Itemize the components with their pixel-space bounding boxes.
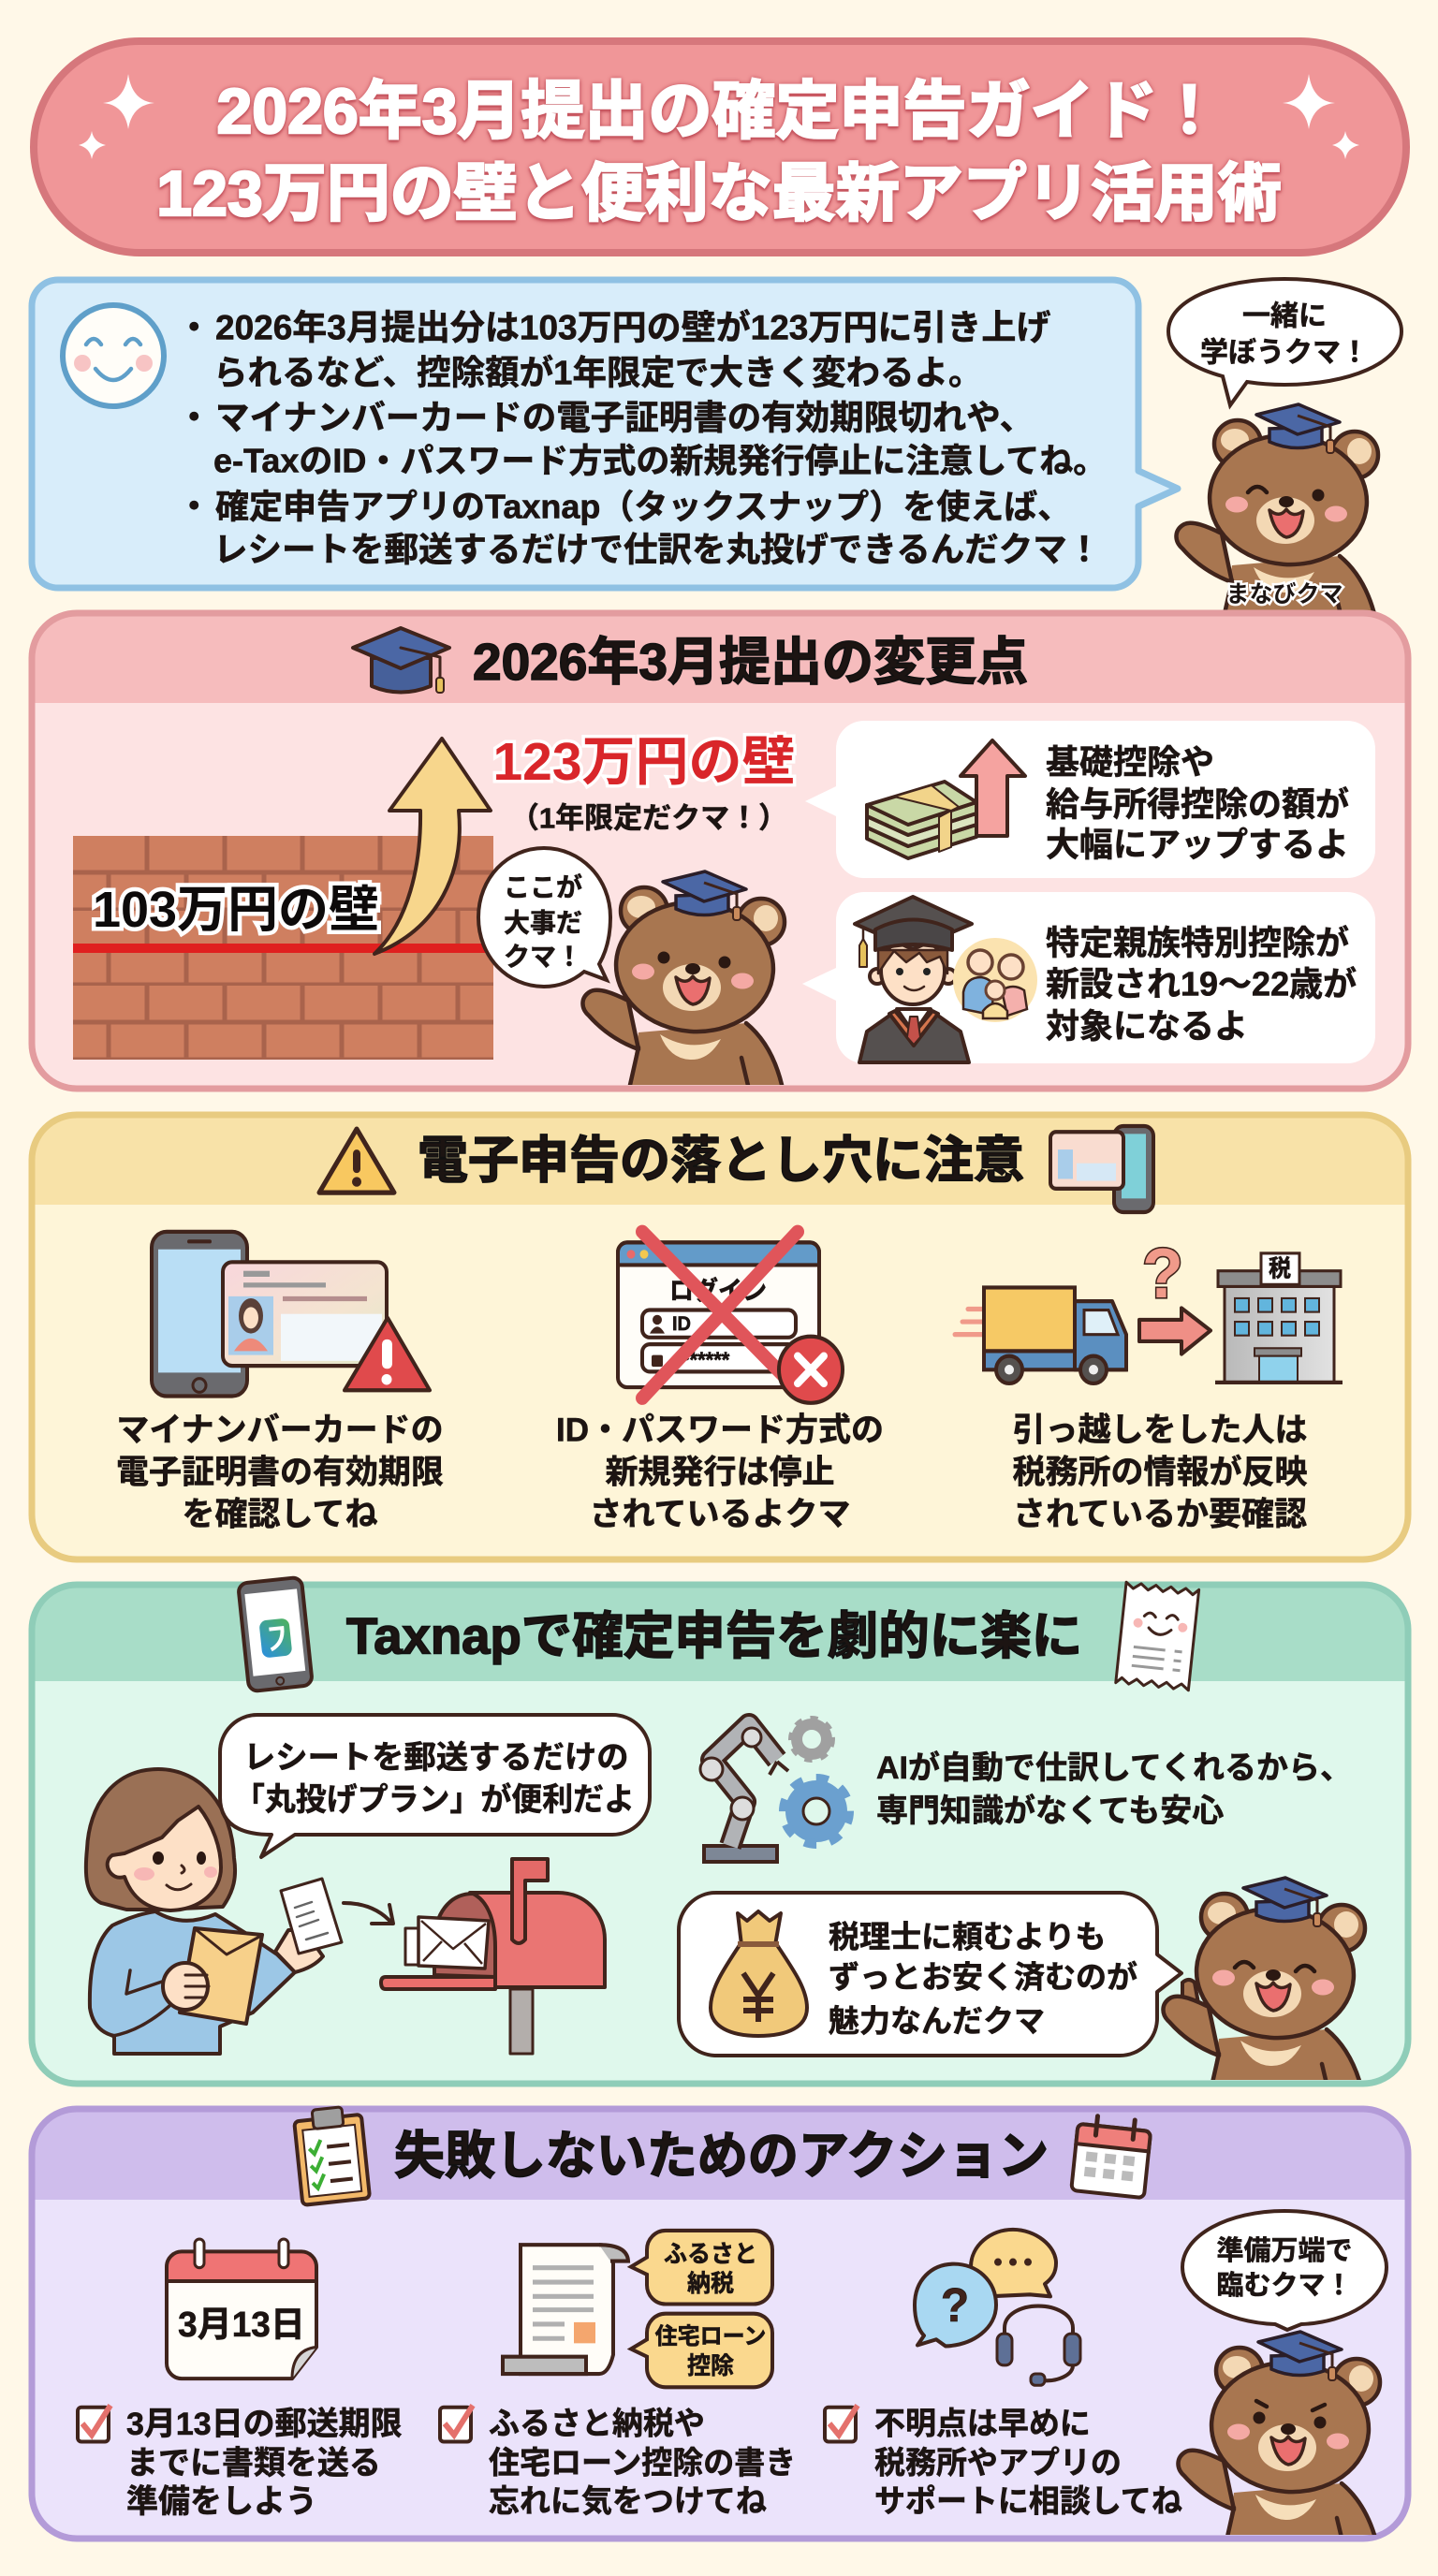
text: furusato and loan check [440,2406,796,2520]
item text: 新規発行は停止 [605,1455,835,1490]
icon: family [953,938,1037,1022]
speech bubble: fully prepared: 臨むクマ！ [1216,2270,1353,2301]
item text [126,2407,403,2520]
bubble text: 税理士に頼むよりも [829,1919,1106,1954]
wall label: 103: 103万円の壁 [93,882,379,938]
item text: 不明点は早めに [874,2407,1091,2442]
icon: red mailbox [381,1859,605,2054]
icon: question mark: ? [1142,1233,1183,1312]
heading: actions: 失敗しないためのアクション [394,2127,1049,2185]
item text: 税務所やアプリの [874,2446,1122,2481]
item text [1012,1412,1308,1533]
callout: housing loan: 控除 [687,2353,734,2379]
item text: 税務所の情報が反映 [1012,1455,1308,1490]
panel: actions [32,2105,1408,2554]
item text: 3月13日の郵送期限 [126,2407,403,2442]
card text [1046,743,1349,863]
card text: 特定親族特別控除が [1046,923,1349,962]
icon: login window crossed out: ****** [682,1348,730,1372]
icon: chat and headset [915,2230,1080,2385]
sparkle decorations [79,74,1359,159]
item: id password stopped [556,1232,884,1533]
panel: changes in 2026 [32,613,1408,1093]
callout: housing loan: 住宅ローン [655,2324,766,2349]
item text: ID・パスワード方式の [556,1412,884,1449]
intro bullet text: ・ [177,399,212,436]
icon: chat and headset: ? [941,2278,969,2332]
intro bullet text [177,309,1107,569]
speech bubble: cheaper than accountant [679,1893,1181,2056]
speech bubble: fully prepared [1182,2211,1387,2330]
action items and header [78,2105,1182,2520]
item text [116,1412,444,1533]
red line on wall [73,944,493,953]
icon: tax office building: 税 [1269,1255,1291,1281]
item text: までに書類を送る [126,2446,381,2481]
text: AI auto bookkeeping [876,1749,1352,1829]
arrow: receipt to mailbox [344,1903,393,1924]
bear mascot: pointing [582,871,785,1093]
speech bubble: important: 大事だ [504,908,582,938]
speech bubble: marunage plan: レシートを郵送するだけの [243,1740,629,1776]
heading: pitfalls: 電子申告の落とし穴に注意 [418,1133,1024,1189]
item text: 電子証明書の有効期限 [116,1455,444,1490]
intro bullet text: e-TaxのID・パスワード方式の新規発行停止に注意してね。 [213,442,1107,479]
intro bullet text: られるなど、控除額が1年限定で大きく変わるよ。 [213,354,982,391]
item text [874,2407,1182,2520]
speech bubble: learn together: 学ぼうクマ！ [1200,337,1369,369]
intro bullet text: 確定申告アプリのTaxnap（タックスナップ）を使えば、 [215,487,1071,526]
intro bullet text: ・ [177,487,212,526]
intro bullet text: 2026年3月提出分は103万円の壁が123万円に引き上げ [215,309,1050,346]
new wall label: 123万円の壁 [492,732,796,792]
bubble text: 魅力なんだクマ [829,2003,1045,2039]
brick wall [73,836,493,1060]
new wall label: （1年限定だクマ！） [510,801,787,835]
item: moved address [955,1233,1343,1533]
text: deadline check [78,2406,403,2520]
icon: small calendar [1071,2115,1152,2198]
callout: furusato tax: ふるさと [664,2241,757,2268]
item text: されているよクマ [590,1496,850,1533]
callout: furusato tax [631,2231,772,2305]
item text: ふるさと納税や [489,2407,705,2442]
icon: warning triangle [319,1129,394,1193]
title text: 2026年3月提出の確定申告ガイド！ [216,76,1222,147]
icon: calendar March 13 [167,2239,316,2378]
icon: login window crossed out [618,1232,843,1403]
icon: smiling face [63,305,164,406]
icon: tax office building [1215,1253,1343,1383]
illustration: woman with envelope [86,1769,342,2054]
speech bubble: marunage plan [220,1715,650,1857]
icon: clipboard [293,2105,370,2205]
new wall label [492,732,796,835]
card text: 新設され19〜22歳が [1046,964,1357,1003]
item text: サポートに相談してね [874,2484,1182,2520]
speech bubble: important: ここが [504,872,582,902]
bear mascot: determined [1178,2332,1380,2554]
heading: changes: 2026年3月提出の変更点 [473,633,1028,691]
card text: 大幅にアップするよ [1046,826,1349,863]
item: my number card expiry [116,1232,444,1533]
icon: moving truck [955,1287,1126,1383]
title text: 123万円の壁と便利な最新アプリ活用術 [156,158,1282,229]
icon: phone with my number card [152,1232,430,1397]
item text: マイナンバーカードの [116,1412,444,1449]
intro bullet text: レシートを郵送するだけで仕訳を丸投げできるんだクマ！ [213,530,1101,569]
icon: money bag [711,1911,807,2036]
title text [156,76,1282,229]
intro speech panel [32,280,1178,588]
text: AI auto bookkeeping: AIが自動で仕訳してくれるから、 [876,1749,1352,1786]
item text: 忘れに気をつけてね [489,2484,767,2520]
icon: graduation cap [353,628,449,693]
icon: document scroll [503,2245,628,2374]
icon: login window crossed out: ID [672,1312,691,1335]
icon: smiling receipt [1116,1582,1199,1690]
card text [1046,923,1357,1045]
item text [556,1412,884,1533]
icon: graduate [855,897,972,1062]
card text: 給与所得控除の額が [1046,784,1349,824]
panel: e-filing pitfalls [32,1115,1408,1559]
speech bubble: learn together: 一緒に [1242,301,1327,331]
icon: up arrow [961,740,1025,836]
bear mascot: manabi kuma [1176,404,1378,626]
title banner [34,41,1406,253]
card text: 基礎控除や [1046,743,1214,781]
item text: 住宅ローン控除の書き [489,2446,796,2481]
speech bubble: important [478,848,610,987]
speech bubble: fully prepared: 準備万端で [1216,2235,1353,2266]
callout: furusato tax: 納税 [687,2271,734,2297]
icon: robot arm and gears [700,1719,849,1862]
bear mascot: thumbs up [1163,1878,1365,2100]
icon: phone with app [238,1577,313,1691]
item text: 引っ越しをした人は [1012,1412,1308,1449]
card: dependent deduction [802,892,1375,1063]
icon: checkbox [78,2406,110,2442]
arrow: to tax office [1139,1308,1211,1354]
icon: phone and card [1050,1126,1153,1212]
item text: されているか要確認 [1013,1496,1307,1533]
intro bullet text: マイナンバーカードの電子証明書の有効期限切れや、 [215,399,1034,436]
icon: checkbox [440,2406,473,2442]
heading: Taxnap: Taxnapで確定申告を劇的に楽に [346,1608,1082,1664]
item text [489,2407,796,2520]
arrow: rising wall [374,739,491,954]
icon: login window crossed out: ログイン [669,1276,767,1305]
mascot name label: まなびクマ [1225,581,1343,607]
text: ask early check [825,2406,1182,2520]
icon: checkbox [825,2406,858,2442]
card: deduction increases [805,721,1375,878]
speech bubble: learn together [1168,279,1401,405]
speech bubble: important: クマ！ [504,942,582,972]
callout: housing loan [631,2314,772,2387]
item text: を確認してね [183,1496,377,1533]
panel: Taxnap [32,1577,1408,2100]
intro bullet text: ・ [177,309,212,346]
bubble text [829,1919,1137,2039]
card text: 対象になるよ [1046,1007,1248,1045]
text: AI auto bookkeeping: 専門知識がなくても安心 [876,1793,1224,1829]
icon: calendar March 13: 3月13日 [178,2305,305,2344]
item text: 準備をしよう [126,2484,317,2520]
bubble text: ずっとお安く済むのが [829,1960,1137,1994]
icon: money stack [867,782,976,858]
speech bubble: marunage plan: 「丸投げプラン」が便利だよ [234,1781,635,1818]
